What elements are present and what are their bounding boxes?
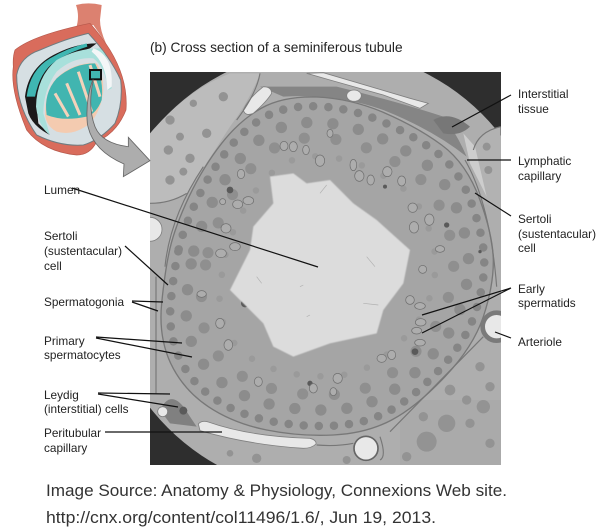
labels: left: Primary [44, 334, 85, 348]
labels: right: Sertoli [518, 212, 551, 226]
outer wall [13, 23, 126, 155]
labels: right: Early [518, 282, 545, 296]
dark pyknotic spots [179, 185, 482, 415]
image source credit [46, 482, 507, 527]
lobules [46, 63, 102, 119]
labels: left [44, 183, 129, 455]
tissue outside the tubule [150, 73, 501, 464]
labels: left: (interstitial) cells [44, 402, 129, 416]
labels: right: spermatids [518, 296, 576, 310]
labels: right: Interstitial [518, 87, 568, 101]
epididymis body [36, 48, 112, 135]
locator box [90, 70, 101, 79]
labels: left: Lumen [44, 183, 80, 197]
inner membrane [17, 33, 121, 145]
labels: right: Arteriole [518, 335, 562, 349]
lobule septa [55, 65, 100, 117]
thin walls of neighbouring tissue [150, 73, 501, 460]
labels: left: Peritubular [44, 426, 101, 440]
labels: left: capillary [44, 441, 87, 455]
labels: right: capillary [518, 169, 561, 183]
black cavity [25, 43, 97, 135]
arrow: zoom to micrograph [87, 80, 150, 177]
labels: right: cell [518, 241, 536, 255]
micrograph: seminiferous tubule cross section [150, 72, 501, 465]
debris in lumen [257, 185, 378, 317]
epididymis coil [27, 43, 87, 97]
nuclei rings [170, 106, 484, 426]
labels: right: Lymphatic [518, 154, 571, 168]
labels: right: tissue [518, 102, 549, 116]
seminiferous epithelium [161, 97, 493, 435]
illustration: testis [13, 3, 126, 155]
spermatic cord [76, 3, 106, 43]
leader lines [72, 95, 511, 432]
image source credit: http://cnx.org/content/col11496/1.6/, Jun 19, 2013. [46, 509, 436, 527]
testis body [45, 63, 103, 133]
vessels [138, 73, 511, 460]
labels: left: cell [44, 259, 62, 273]
labels: left: spermatocytes [44, 348, 121, 362]
image source credit: Image Source: Anatomy & Physiology, Connexions Web site. [46, 482, 507, 500]
labels: left: Leydig [44, 388, 79, 402]
heading: (b) Cross section of a seminiferous tubule [150, 40, 403, 55]
labels: left: (sustentacular) [44, 244, 122, 258]
labels: left: Spermatogonia [44, 295, 124, 309]
labels: right: (sustentacular) [518, 227, 596, 241]
lumen [230, 173, 410, 357]
spermatid nuclei outlines [197, 129, 445, 396]
labels: left: Sertoli [44, 229, 77, 243]
labels: right [518, 87, 596, 349]
white membrane [92, 48, 112, 90]
